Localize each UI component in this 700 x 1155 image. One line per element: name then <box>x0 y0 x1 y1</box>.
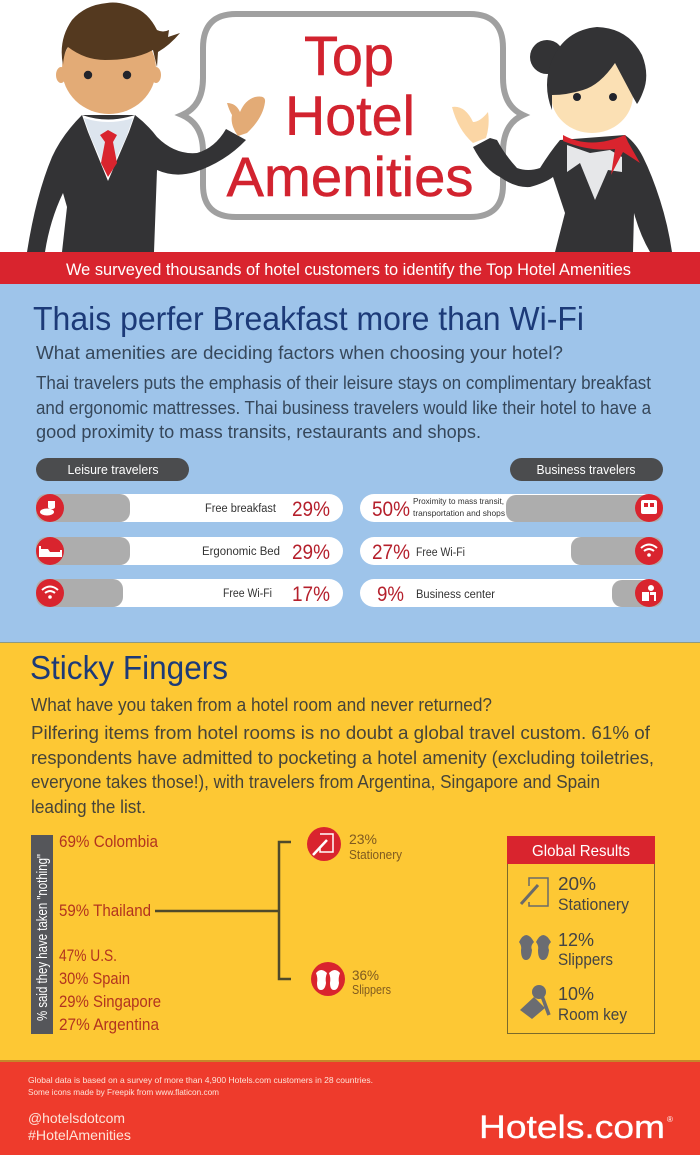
social handles: @hotelsdotcom <box>28 1110 125 1126</box>
bar: free wi-fi leisure <box>36 579 343 607</box>
body text <box>31 723 654 817</box>
bar: business center: 9% <box>377 583 404 606</box>
body text: good proximity to mass transits, restaurants and shops. <box>36 422 481 442</box>
source note: Global data is based on a survey of more than 4,900 Hotels.com customers in 28 countries. <box>28 1075 373 1085</box>
stationery result: 23% <box>349 831 377 847</box>
business travelers label: Business travelers <box>536 462 636 477</box>
country list: 59% Thailand <box>59 901 151 920</box>
body text: everyone takes those!), with travelers from Argentina, Singapore and Spain <box>31 772 600 792</box>
logo: Hotels.com: ® <box>667 1115 673 1124</box>
bar: business center <box>360 579 663 607</box>
country list: 47% U.S. <box>59 946 117 965</box>
business travelers label <box>510 458 663 481</box>
slippers result <box>311 962 391 997</box>
illustration: female host <box>452 27 672 252</box>
header panel <box>0 0 700 252</box>
title: Top <box>304 24 394 87</box>
body text: Thai travelers puts the emphasis of their leisure stays on complimentary breakfast <box>36 373 651 393</box>
country list <box>59 832 161 1034</box>
box header <box>507 836 655 864</box>
connector bracket <box>155 842 291 979</box>
heading: Sticky Fingers <box>30 649 228 686</box>
global item: room key: 10% <box>558 983 594 1004</box>
title <box>226 24 474 208</box>
country list: 27% Argentina <box>59 1015 159 1034</box>
global item: slippers: 12% <box>558 929 594 950</box>
survey banner: We surveyed thousands of hotel customers to identify the Top Hotel Amenities <box>66 261 631 279</box>
slippers result: 36% <box>352 967 379 983</box>
footer <box>0 1060 700 1155</box>
logo: Hotels.com: Hotels.com <box>479 1109 665 1145</box>
social handles: #HotelAmenities <box>28 1127 131 1143</box>
bar: free wi-fi business <box>360 537 663 565</box>
global item: slippers <box>519 929 613 969</box>
global item: room key <box>520 983 627 1024</box>
body text: and ergonomic mattresses. Thai business travelers would like their hotel to have a <box>36 398 652 418</box>
country list: 29% Singapore <box>59 992 161 1011</box>
body text <box>36 373 652 442</box>
survey banner <box>0 252 700 284</box>
bar: free wi-fi business: 27% <box>372 541 410 564</box>
global results box <box>507 836 655 1034</box>
stationery result: Stationery <box>349 848 403 862</box>
country list: 30% Spain <box>59 969 130 988</box>
box header: Global Results <box>532 843 630 860</box>
country list: 69% Colombia <box>59 832 158 851</box>
stationery result <box>307 827 403 862</box>
leisure travelers label <box>36 458 189 481</box>
illustration: male host <box>27 2 265 252</box>
bar: ergonomic bed <box>36 537 343 565</box>
title: Amenities <box>226 145 474 208</box>
body text: Pilfering items from hotel rooms is no doubt a global travel custom. 61% of <box>31 723 651 743</box>
body text: leading the list. <box>31 797 146 817</box>
bar: proximity to mass transit: 50% <box>372 498 410 521</box>
bar: free breakfast: Free breakfast <box>205 503 277 515</box>
bar: business center: Business center <box>416 589 495 601</box>
source note: Some icons made by Freepik from www.flaticon.com <box>28 1087 219 1097</box>
bar: free wi-fi leisure: Free Wi-Fi <box>223 588 272 600</box>
global item: slippers: Slippers <box>558 950 613 969</box>
panel: breakfast vs wi-fi <box>0 284 700 642</box>
body text: respondents have admitted to pocketing a hotel amenity (excluding toiletries, <box>31 748 654 768</box>
social handles <box>28 1110 131 1143</box>
heading: Thais perfer Breakfast more than Wi-Fi <box>33 300 584 337</box>
bar: proximity to mass transit: Proximity to mass transit, <box>413 496 504 506</box>
question: What have you taken from a hotel room and never returned? <box>31 695 492 715</box>
bar: free wi-fi leisure: 17% <box>292 583 330 606</box>
global item: stationery: 20% <box>558 873 596 894</box>
leisure travelers label: Leisure travelers <box>68 462 159 477</box>
bar: free breakfast: 29% <box>292 498 330 521</box>
bar: ergonomic bed: Ergonomic Bed <box>202 546 280 558</box>
vertical label: % said they have taken "nothing" <box>35 854 51 1021</box>
bar: proximity to mass transit <box>360 494 663 522</box>
source note <box>28 1075 373 1097</box>
slippers result: Slippers <box>352 983 391 997</box>
global item: stationery <box>521 873 629 914</box>
panel: sticky fingers <box>0 642 700 1062</box>
question: What amenities are deciding factors when choosing your hotel? <box>36 343 563 363</box>
bar: free breakfast <box>36 494 343 522</box>
global item: stationery: Stationery <box>558 895 629 914</box>
bar: free wi-fi business: Free Wi-Fi <box>416 547 465 559</box>
vertical label <box>31 835 53 1034</box>
bar: proximity to mass transit: transportation and shops <box>413 508 505 518</box>
title: Hotel <box>285 84 415 147</box>
speech bubble frame <box>182 14 523 217</box>
global item: room key: Room key <box>558 1005 627 1024</box>
bar: ergonomic bed: 29% <box>292 541 330 564</box>
